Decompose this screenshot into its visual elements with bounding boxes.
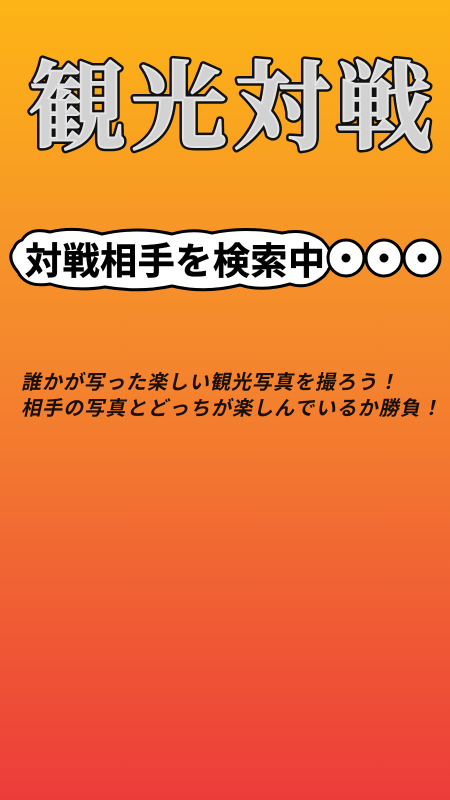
title: 光 [131, 32, 227, 169]
title: 対 [234, 32, 330, 169]
description text [20, 370, 445, 420]
title: 戦 [336, 32, 434, 169]
title: 光 [131, 32, 227, 169]
title: 観 [29, 32, 125, 169]
title: 観 [29, 32, 125, 169]
title: 対 [234, 32, 330, 169]
bubble text: 対戦相手を検索中 [25, 241, 325, 282]
loading dot 3 [404, 240, 440, 276]
status bubble: searching for opponent [11, 229, 440, 290]
title: 戦 [336, 32, 434, 169]
bubble outline [11, 229, 332, 290]
title [29, 32, 434, 169]
description text: 誰かが写った楽しい観光写真を撮ろう！ [20, 370, 402, 394]
loading dot 1 [328, 240, 364, 276]
loading dot 2 [366, 240, 402, 276]
description text: 相手の写真とどっちが楽しんでいるか勝負！ [20, 396, 445, 420]
